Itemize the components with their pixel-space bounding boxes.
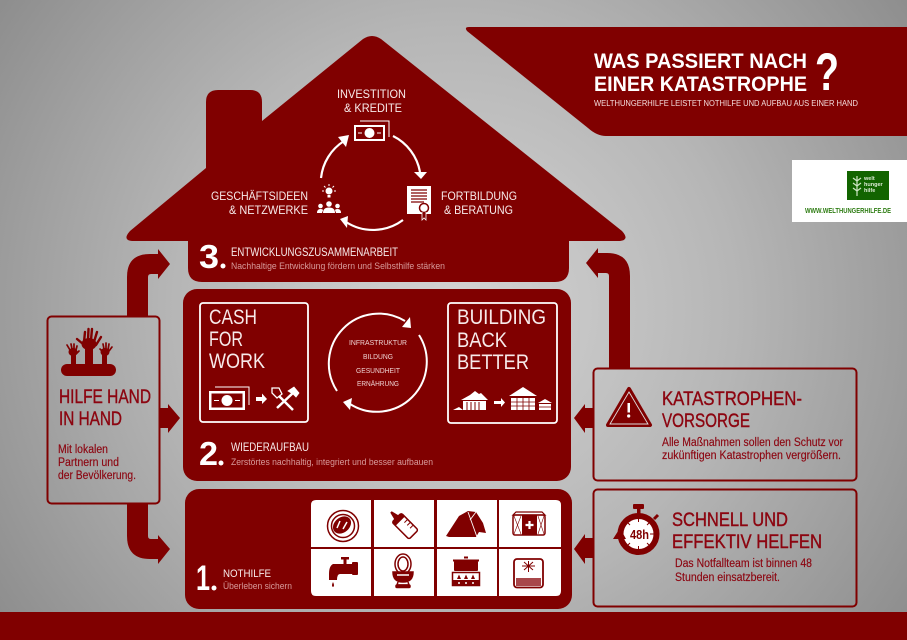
text block: Partnern und bbox=[58, 457, 119, 469]
icon: first aid kit bbox=[513, 512, 545, 535]
number 2: 2 bbox=[199, 435, 218, 472]
text: subheading level 3: Nachhaltige Entwicklung fördern und Selbsthilfe stärken bbox=[231, 261, 445, 271]
heading: VORSORGE bbox=[662, 411, 750, 432]
heading: HILFE HAND bbox=[59, 387, 151, 408]
icon: rebuilt houses bbox=[509, 387, 552, 410]
icon: cooking stove bbox=[452, 556, 480, 586]
heading: EFFEKTIV HELFEN bbox=[672, 532, 822, 553]
icon: money bbox=[209, 387, 249, 410]
icon: warning triangle bbox=[608, 389, 650, 425]
icon: water tap bbox=[329, 557, 358, 587]
box: building back better: BUILDING bbox=[457, 306, 546, 329]
panel: schnell und effektiv helfen bbox=[594, 490, 856, 606]
text block: der Bevölkerung. bbox=[58, 470, 136, 482]
text: subheading level 1: Überleben sichern bbox=[223, 581, 292, 591]
logo: Welthungerhilfe: welt bbox=[863, 176, 875, 182]
icon grid bbox=[311, 500, 561, 596]
text block bbox=[662, 437, 843, 462]
logo: Welthungerhilfe bbox=[792, 160, 907, 222]
box: cash for work: FOR bbox=[209, 328, 243, 351]
logo: Welthungerhilfe: WWW.WELTHUNGERHILFE.DE bbox=[805, 208, 891, 215]
heading: SCHNELL UND bbox=[672, 510, 788, 531]
cycle: rebuilding areas: BILDUNG bbox=[363, 354, 393, 361]
cycle labels: GESCHÄFTSIDEEN bbox=[211, 189, 308, 203]
panel: reconstruction, level 2 bbox=[183, 289, 571, 481]
subtitle: WELTHUNGERHILFE LEISTET NOTHILFE UND AUFBAU AUS EINER HAND bbox=[594, 99, 858, 108]
main heading bbox=[594, 50, 807, 96]
icon: arrow bbox=[494, 398, 505, 407]
cycle labels: & BERATUNG bbox=[444, 203, 513, 217]
flow arrow: upper right bbox=[574, 404, 593, 433]
icon: mosquito net bbox=[514, 559, 543, 588]
main heading: WAS PASSIERT NACH bbox=[594, 50, 807, 73]
cycle: rebuilding areas bbox=[329, 314, 427, 412]
heading: KATASTROPHEN- bbox=[662, 389, 802, 410]
cycle labels: & NETZWERKE bbox=[229, 203, 308, 217]
logo: Welthungerhilfe: hunger bbox=[864, 182, 883, 188]
text block: Stunden einsatzbereit. bbox=[675, 572, 780, 584]
box: building back better: BETTER bbox=[457, 351, 529, 374]
cycle labels: FORTBILDUNG bbox=[441, 189, 517, 203]
icon: damaged hut bbox=[453, 391, 488, 410]
box: cash for work: CASH bbox=[209, 306, 257, 329]
text block: Mit lokalen bbox=[58, 444, 108, 456]
cycle: rebuilding areas: ERNÄHRUNG bbox=[357, 380, 399, 388]
icon: stopwatch 48h: 48h bbox=[630, 527, 649, 542]
cycle arrowheads bbox=[338, 135, 427, 228]
text block: zukünftigen Katastrophen vergrößern. bbox=[662, 450, 841, 462]
number 3: 3 bbox=[199, 238, 219, 275]
icon: food plate bbox=[328, 510, 358, 542]
box: cash for work bbox=[200, 303, 308, 422]
number 3 bbox=[199, 238, 226, 275]
text: subheading level 2: Zerstörtes nachhaltig, integriert und besser aufbauen bbox=[231, 457, 433, 467]
box: cash for work: WORK bbox=[209, 350, 265, 373]
icon: baby bottle bbox=[386, 507, 418, 539]
flow arrow: top left bbox=[127, 249, 170, 316]
heading: IN HAND bbox=[59, 409, 122, 430]
icon: shovel and hammer bbox=[272, 387, 299, 410]
cycle: rebuilding areas: INFRASTRUKTUR bbox=[349, 340, 407, 347]
flow arrow: middle left bbox=[160, 404, 180, 433]
footer bar bbox=[0, 612, 907, 640]
icon: money bbox=[354, 121, 389, 141]
heading: Nothilfe: NOTHILFE bbox=[223, 568, 271, 580]
icon: toilet bbox=[393, 554, 413, 588]
icon: idea and people bbox=[317, 184, 341, 213]
main heading: EINER KATASTROPHE bbox=[594, 73, 807, 96]
icon: tent bbox=[446, 511, 486, 537]
flow arrow: bottom left bbox=[127, 504, 170, 564]
text block: Alle Maßnahmen sollen den Schutz vor bbox=[662, 437, 843, 449]
panel: Hilfe Hand in Hand bbox=[48, 316, 160, 504]
heading: Entwicklungszusammenarbeit: ENTWICKLUNGSZUSAMMENARBEIT bbox=[231, 245, 399, 259]
cycle labels: & KREDITE bbox=[344, 101, 402, 115]
logo: Welthungerhilfe: hilfe bbox=[864, 188, 875, 194]
title banner bbox=[466, 27, 907, 136]
cycle labels bbox=[211, 87, 517, 217]
flow arrow: top right bbox=[586, 248, 630, 368]
cycle: rebuilding areas: GESUNDHEIT bbox=[356, 368, 401, 375]
panel: house roof, level 3 bbox=[126, 36, 626, 282]
question mark: ? bbox=[815, 43, 839, 102]
heading bbox=[59, 387, 151, 430]
cycle arrows bbox=[321, 136, 420, 230]
box: building back better bbox=[448, 303, 557, 423]
number 1: 1 bbox=[196, 559, 210, 598]
text block bbox=[58, 444, 136, 482]
panel: Katastrophenvorsorge bbox=[594, 368, 856, 480]
box: building back better: BACK bbox=[457, 329, 507, 352]
icon: raised hands bbox=[61, 329, 116, 376]
flow arrow: lower right bbox=[574, 534, 593, 564]
heading bbox=[662, 389, 802, 432]
text block: Das Notfallteam ist binnen 48 bbox=[675, 558, 812, 570]
heading: Wiederaufbau: WIEDERAUFBAU bbox=[231, 440, 309, 454]
text block bbox=[675, 558, 812, 584]
icon: arrow bbox=[256, 394, 267, 404]
icon: certificate bbox=[407, 186, 431, 220]
icon: stopwatch 48h bbox=[613, 504, 658, 552]
cycle labels: INVESTITION bbox=[337, 87, 406, 101]
heading bbox=[672, 510, 822, 553]
panel: emergency relief, level 1 bbox=[185, 489, 572, 609]
